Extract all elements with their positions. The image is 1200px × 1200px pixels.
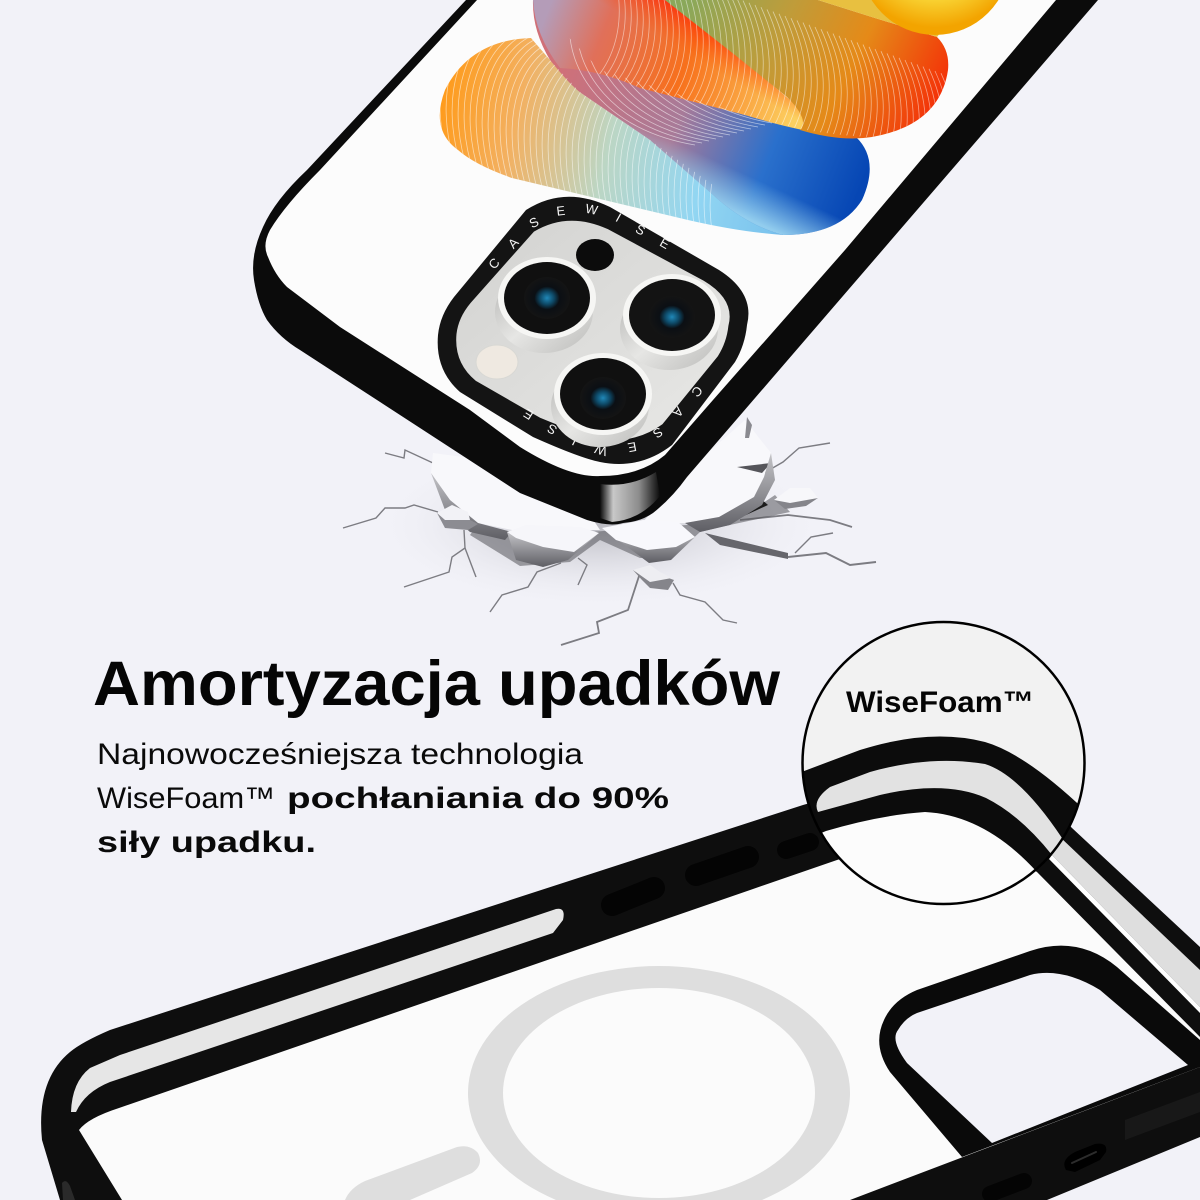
magsafe bar (345, 1146, 480, 1200)
callout: WiseFoam magnifier (801, 620, 1086, 906)
lens 1 (495, 257, 596, 353)
small rock right (774, 488, 818, 509)
left plate edge (431, 473, 512, 540)
lens 2 (620, 274, 721, 370)
small rock left (437, 505, 478, 530)
description: siły upadku. (97, 826, 316, 859)
crack lines (343, 443, 876, 645)
clear back panel (79, 843, 1200, 1200)
artwork: yellow sphere (872, 0, 998, 35)
camera cut-out opening (895, 973, 1188, 1143)
cracked wall impact (343, 417, 876, 645)
small rock below (633, 565, 674, 590)
rock: centre right (602, 528, 695, 563)
lens 3 (551, 353, 652, 447)
right window strip (1052, 837, 1200, 1007)
bumper highlight (600, 472, 660, 522)
ring text bottom: CASEWISE (523, 387, 702, 456)
ring text top: CASEWISE (490, 204, 670, 268)
wedge cracks (705, 533, 788, 559)
description (97, 738, 669, 859)
artwork: colour waves (440, 0, 998, 235)
callout label: WiseFoam™ (846, 686, 1034, 719)
wave lines: blue band (570, 38, 772, 146)
dark gaps (470, 495, 790, 566)
bar sheen (1125, 1092, 1200, 1140)
bottom case (41, 758, 1200, 1200)
description: WiseFoam™ (97, 782, 275, 815)
camera plate (456, 221, 730, 440)
microphone hole (576, 239, 614, 271)
impact shadow (370, 440, 830, 610)
case bumper (253, 0, 1098, 524)
wave lines: left capsule (440, 38, 712, 225)
description: pochłaniania do 90% (287, 782, 669, 815)
wave lines: red and orange band (599, 0, 946, 137)
camera cut-out frame (879, 946, 1200, 1157)
description: Najnowocześniejsza technologia (97, 738, 583, 771)
side buttons (612, 842, 1024, 1194)
strip edge (1049, 855, 1200, 1013)
case frame (41, 758, 1200, 1200)
magsafe ring (468, 966, 850, 1200)
title: Amortyzacja upadków (93, 649, 781, 719)
phone back (265, 0, 1056, 476)
top phone with case (253, 0, 1098, 524)
raised plate right (640, 420, 771, 525)
raised plate left (431, 453, 600, 530)
camera module ring (438, 196, 748, 464)
right plate edge (685, 453, 775, 532)
left window strip (71, 909, 564, 1112)
rock: centre left (507, 532, 599, 567)
charging port (62, 1181, 75, 1200)
bottom switch (1064, 1144, 1106, 1172)
flash (476, 345, 518, 379)
